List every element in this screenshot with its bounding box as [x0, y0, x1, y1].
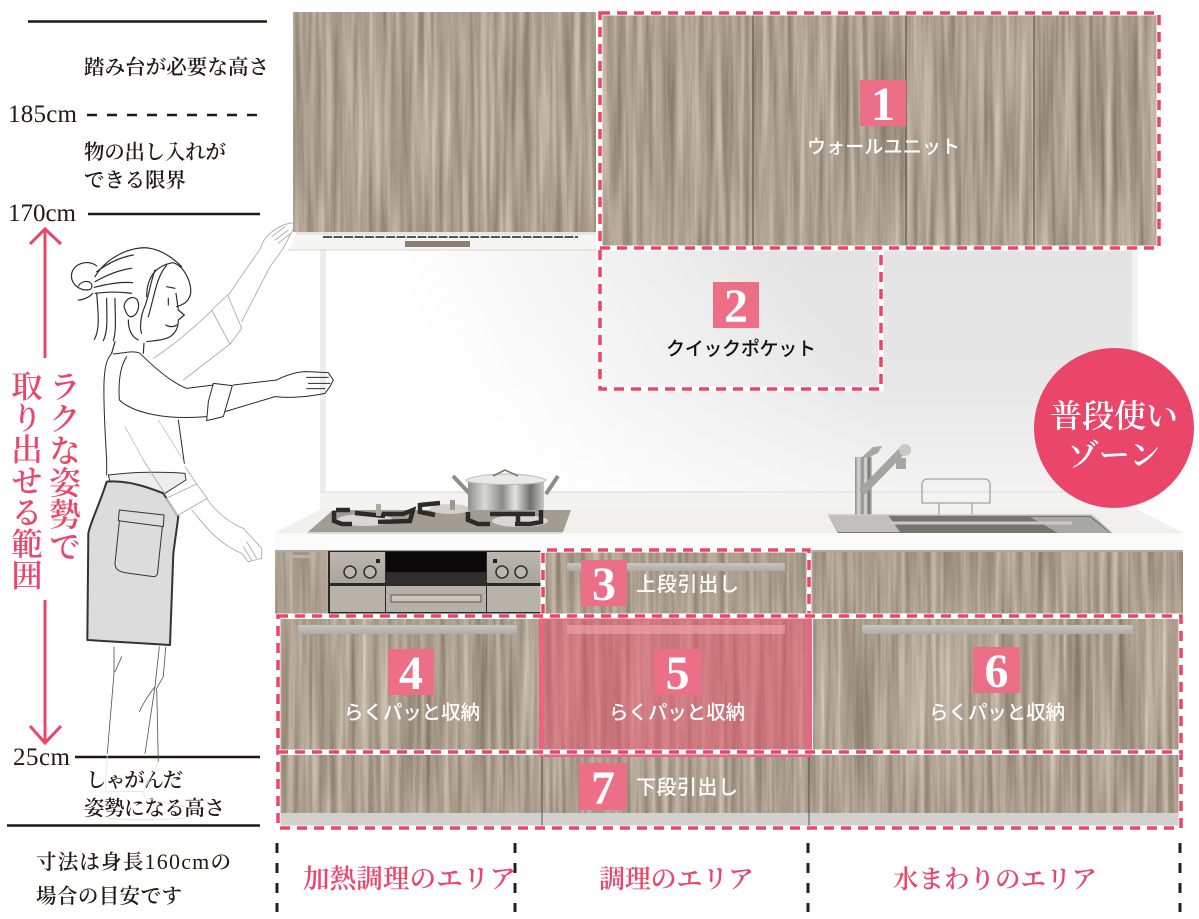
height labels: 185cm [8, 101, 78, 128]
label 6 [929, 645, 1065, 724]
label 5 [609, 647, 745, 724]
faucet [855, 444, 911, 516]
height labels: 170cm [8, 200, 77, 227]
badge: everyday zone: ゾーン [1068, 438, 1160, 473]
lower arm (ghosted) [143, 460, 262, 562]
sink [828, 515, 1112, 533]
height labels [8, 56, 269, 908]
label 7: lower drawer: 下段引出し [636, 776, 738, 799]
label 1: wall unit: 1 [871, 78, 895, 131]
label 7: lower drawer [579, 762, 738, 815]
badge: everyday zone [1034, 348, 1194, 508]
area labels: 加熱調理のエリア [303, 864, 516, 894]
range hood [288, 232, 596, 250]
label 2: quick pocket: 2 [724, 280, 748, 333]
area dividers [277, 843, 1180, 912]
label 4: らくパッと収納 [344, 702, 480, 724]
base cabinet row 2 [280, 619, 1180, 750]
dashed frame: upper drawer [543, 550, 809, 614]
vertical heading: reach range: ラクな姿勢で [45, 370, 81, 562]
area labels: 調理のエリア [599, 865, 754, 894]
highlight: zone 5 [542, 618, 810, 754]
label 7: lower drawer: 7 [591, 762, 615, 815]
torso and extended arm [104, 352, 333, 475]
label 4: 4 [399, 647, 423, 700]
height labels: 物の出し入れが [84, 141, 226, 164]
label 1: wall unit: ウォールユニット [807, 136, 960, 158]
raised arm (ghosted) [153, 223, 294, 380]
reach range arrows [30, 229, 61, 743]
legs [107, 647, 166, 762]
cooktop [308, 500, 571, 534]
height labels: 寸法は身長160cmの [36, 849, 231, 874]
height labels: 場合の目安です [36, 885, 182, 908]
label 3: upper drawer: 上段引出し [636, 573, 739, 596]
vertical heading: reach range [8, 370, 81, 591]
apron [87, 472, 186, 645]
dashed frame: base units [278, 616, 1181, 828]
oven and gas controls [328, 551, 542, 614]
height labels: できる限界 [84, 169, 186, 192]
base cabinet row 3 with plinth [280, 755, 1180, 826]
area labels: 水まわりのエリア [893, 865, 1097, 894]
label 3: upper drawer: 3 [592, 558, 616, 611]
dashed frame: wall unit [600, 13, 1159, 248]
label 1: wall unit [807, 78, 960, 158]
height labels: 踏み台が必要な高さ [84, 56, 269, 79]
label 2: quick pocket [666, 280, 816, 360]
height labels: 25cm [13, 744, 71, 771]
vertical heading: reach range: 取り出せる範囲 [8, 370, 42, 591]
area labels [303, 864, 1097, 894]
badge: everyday zone: 普段使い [1050, 398, 1178, 434]
label 5: 5 [666, 647, 690, 700]
wall cabinet right [601, 14, 1158, 247]
pot [453, 470, 558, 510]
dashed frame: quick pocket [600, 250, 881, 389]
feet (ghosted) [105, 755, 185, 820]
head and hair [71, 248, 191, 353]
kitchen illustration [275, 12, 1183, 826]
label 6: らくパッと収納 [929, 702, 1065, 724]
height labels: しゃがんだ [86, 770, 183, 792]
torso inner lines [125, 420, 183, 460]
label 3: upper drawer [581, 558, 739, 611]
label 5: らくパッと収納 [609, 702, 745, 724]
height scale lines [7, 22, 267, 826]
wall cabinet left [293, 12, 596, 232]
figure: woman reaching [71, 223, 333, 820]
countertop [275, 510, 1183, 551]
base cabinet row 1 [275, 552, 1183, 614]
dish rack [922, 479, 990, 518]
height labels: 姿勢になる高さ [84, 797, 225, 820]
label 4 [344, 647, 480, 724]
backsplash wall [320, 250, 1138, 511]
label 2: quick pocket: クイックポケット [666, 338, 816, 360]
label 6: 6 [984, 645, 1008, 698]
